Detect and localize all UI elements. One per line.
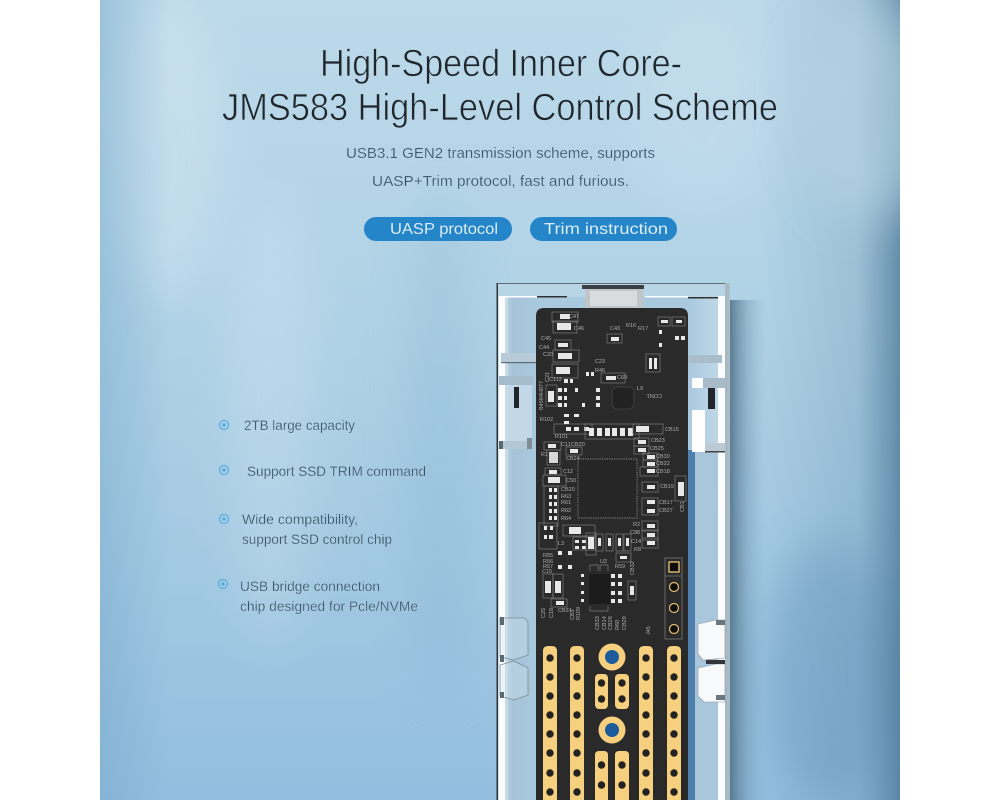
subtitle [346, 145, 655, 190]
silkscreen labels: R109 [576, 607, 582, 620]
silkscreen labels: R55 [543, 553, 553, 559]
SSD enclosure [496, 283, 766, 800]
enclosure body [496, 283, 730, 800]
silkscreen labels: CB30 [656, 454, 670, 460]
silkscreen labels: C43 [610, 326, 620, 332]
gold contact pads [543, 644, 681, 800]
upper component rows [546, 312, 685, 407]
pad holes [546, 654, 678, 796]
feature: Wide compatibility: support SSD control chip [242, 531, 392, 547]
silkscreen labels: C21 [545, 372, 551, 382]
title: JMS583 High-Level Control Scheme [222, 87, 778, 129]
components [539, 312, 686, 607]
silkscreen labels: L9 [637, 386, 643, 392]
silkscreen labels: C50 [566, 478, 576, 484]
silkscreen labels: CB14 [602, 616, 608, 630]
silkscreen labels: R61 [561, 500, 571, 506]
silkscreen labels: R64 [561, 516, 571, 522]
silkscreen labels: C11 [561, 442, 571, 448]
subtitle: USB3.1 GEN2 transmission scheme, supports [346, 145, 655, 162]
silkscreen labels: C88 [630, 530, 640, 536]
feature: Wide compatibility: Wide compatibility, [242, 511, 358, 527]
circuit board [536, 308, 688, 800]
clip: upper right [681, 355, 725, 452]
silkscreen labels: C18 [549, 608, 555, 618]
feature: USB bridge connection: USB bridge connection [240, 578, 380, 594]
USB-C connector [582, 285, 644, 310]
pill: UASP protocol: UASP protocol [390, 221, 498, 238]
silkscreen labels: U2 [600, 559, 607, 565]
silkscreen labels: B4584H877 [539, 381, 545, 410]
silkscreen labels: CB25 [650, 446, 664, 452]
secondary chip U2 [589, 565, 610, 611]
feature: USB bridge connection [218, 578, 418, 614]
silkscreen labels: C20 [543, 352, 553, 358]
silkscreen labels: CB28 [608, 616, 614, 630]
subtitle: UASP+Trim protocol, fast and furious. [372, 173, 629, 190]
silkscreen labels: C23 [595, 359, 605, 365]
title [222, 43, 778, 129]
silkscreen labels: CB22 [656, 461, 670, 467]
pill: Trim instruction: Trim instruction [544, 221, 668, 238]
silkscreen labels: R2 [633, 522, 640, 528]
pill: Trim instruction [530, 217, 677, 241]
silkscreen labels: CB19 [660, 484, 674, 490]
silkscreen labels: C46 [574, 326, 584, 332]
clip: upper left [499, 353, 541, 449]
header pins J45 [665, 558, 682, 639]
silkscreen labels: R63 [561, 494, 571, 500]
silkscreen labels: R17 [638, 326, 648, 332]
feature: USB bridge connection: chip designed for Pcle/NVMe [240, 598, 418, 614]
silkscreen labels: CB1 [680, 501, 686, 512]
silkscreen labels: R8 [634, 547, 641, 553]
silkscreen labels: CB33 [595, 616, 601, 630]
silkscreen labels: C12 [563, 469, 573, 475]
silkscreen labels: CB15 [665, 427, 679, 433]
silkscreen labels: CB29 [622, 616, 628, 630]
silkscreen labels: C112 [549, 377, 562, 383]
silkscreen labels: CB18 [656, 469, 670, 475]
silkscreen labels: R60 [615, 620, 621, 630]
silkscreen labels: CB24 [566, 456, 580, 462]
lower component rows [539, 523, 636, 607]
silkscreen labels: C14 [631, 539, 641, 545]
silkscreen labels: CB31 [558, 608, 572, 614]
title: High-Speed Inner Core- [320, 43, 682, 85]
silkscreen labels: R101 [555, 434, 568, 440]
clip: lower right [698, 620, 725, 702]
silkscreen labels: CB32 [630, 561, 636, 575]
silkscreen labels: C15 [542, 569, 552, 575]
silkscreen labels: R102 [540, 417, 553, 423]
middle component rows [543, 414, 686, 548]
feature list [218, 417, 426, 614]
silkscreen labels: C47 [569, 314, 579, 320]
silkscreen labels: R1 [541, 452, 548, 458]
silkscreen labels: J45 [646, 626, 652, 635]
silkscreen labels: CB17 [659, 500, 673, 506]
inductor L9 [612, 387, 634, 409]
silkscreen labels: CB20 [561, 487, 575, 493]
silkscreen labels [539, 314, 686, 635]
silkscreen labels: R59 [615, 564, 625, 570]
silkscreen labels: CB3 [570, 609, 576, 620]
silkscreen labels: CB27 [659, 508, 673, 514]
silkscreen labels: CON1 [647, 392, 662, 398]
feature: 2TB large capacity: 2TB large capacity [244, 417, 355, 433]
clip: lower left [500, 617, 528, 700]
silkscreen labels: R62 [561, 508, 571, 514]
silkscreen labels: L3 [558, 541, 564, 547]
enclosure shadow [730, 300, 766, 800]
silkscreen labels: C44 [539, 345, 549, 351]
silkscreen labels: C45 [541, 336, 551, 342]
silkscreen labels: C69 [617, 375, 627, 381]
feature: Wide compatibility [220, 511, 392, 547]
silkscreen labels: CB20 [571, 442, 585, 448]
silkscreen labels: C25 [541, 608, 547, 618]
silkscreen labels: R16 [626, 323, 636, 329]
pill: UASP protocol [364, 217, 512, 241]
silkscreen labels: R57 [543, 564, 553, 570]
silkscreen labels: CB23 [651, 438, 665, 444]
main controller chip [578, 459, 637, 518]
silkscreen labels: R56 [543, 559, 553, 565]
silkscreen labels: R46 [595, 368, 605, 374]
feature: Support SSD TRIM command: Support SSD TRIM command [247, 463, 426, 479]
